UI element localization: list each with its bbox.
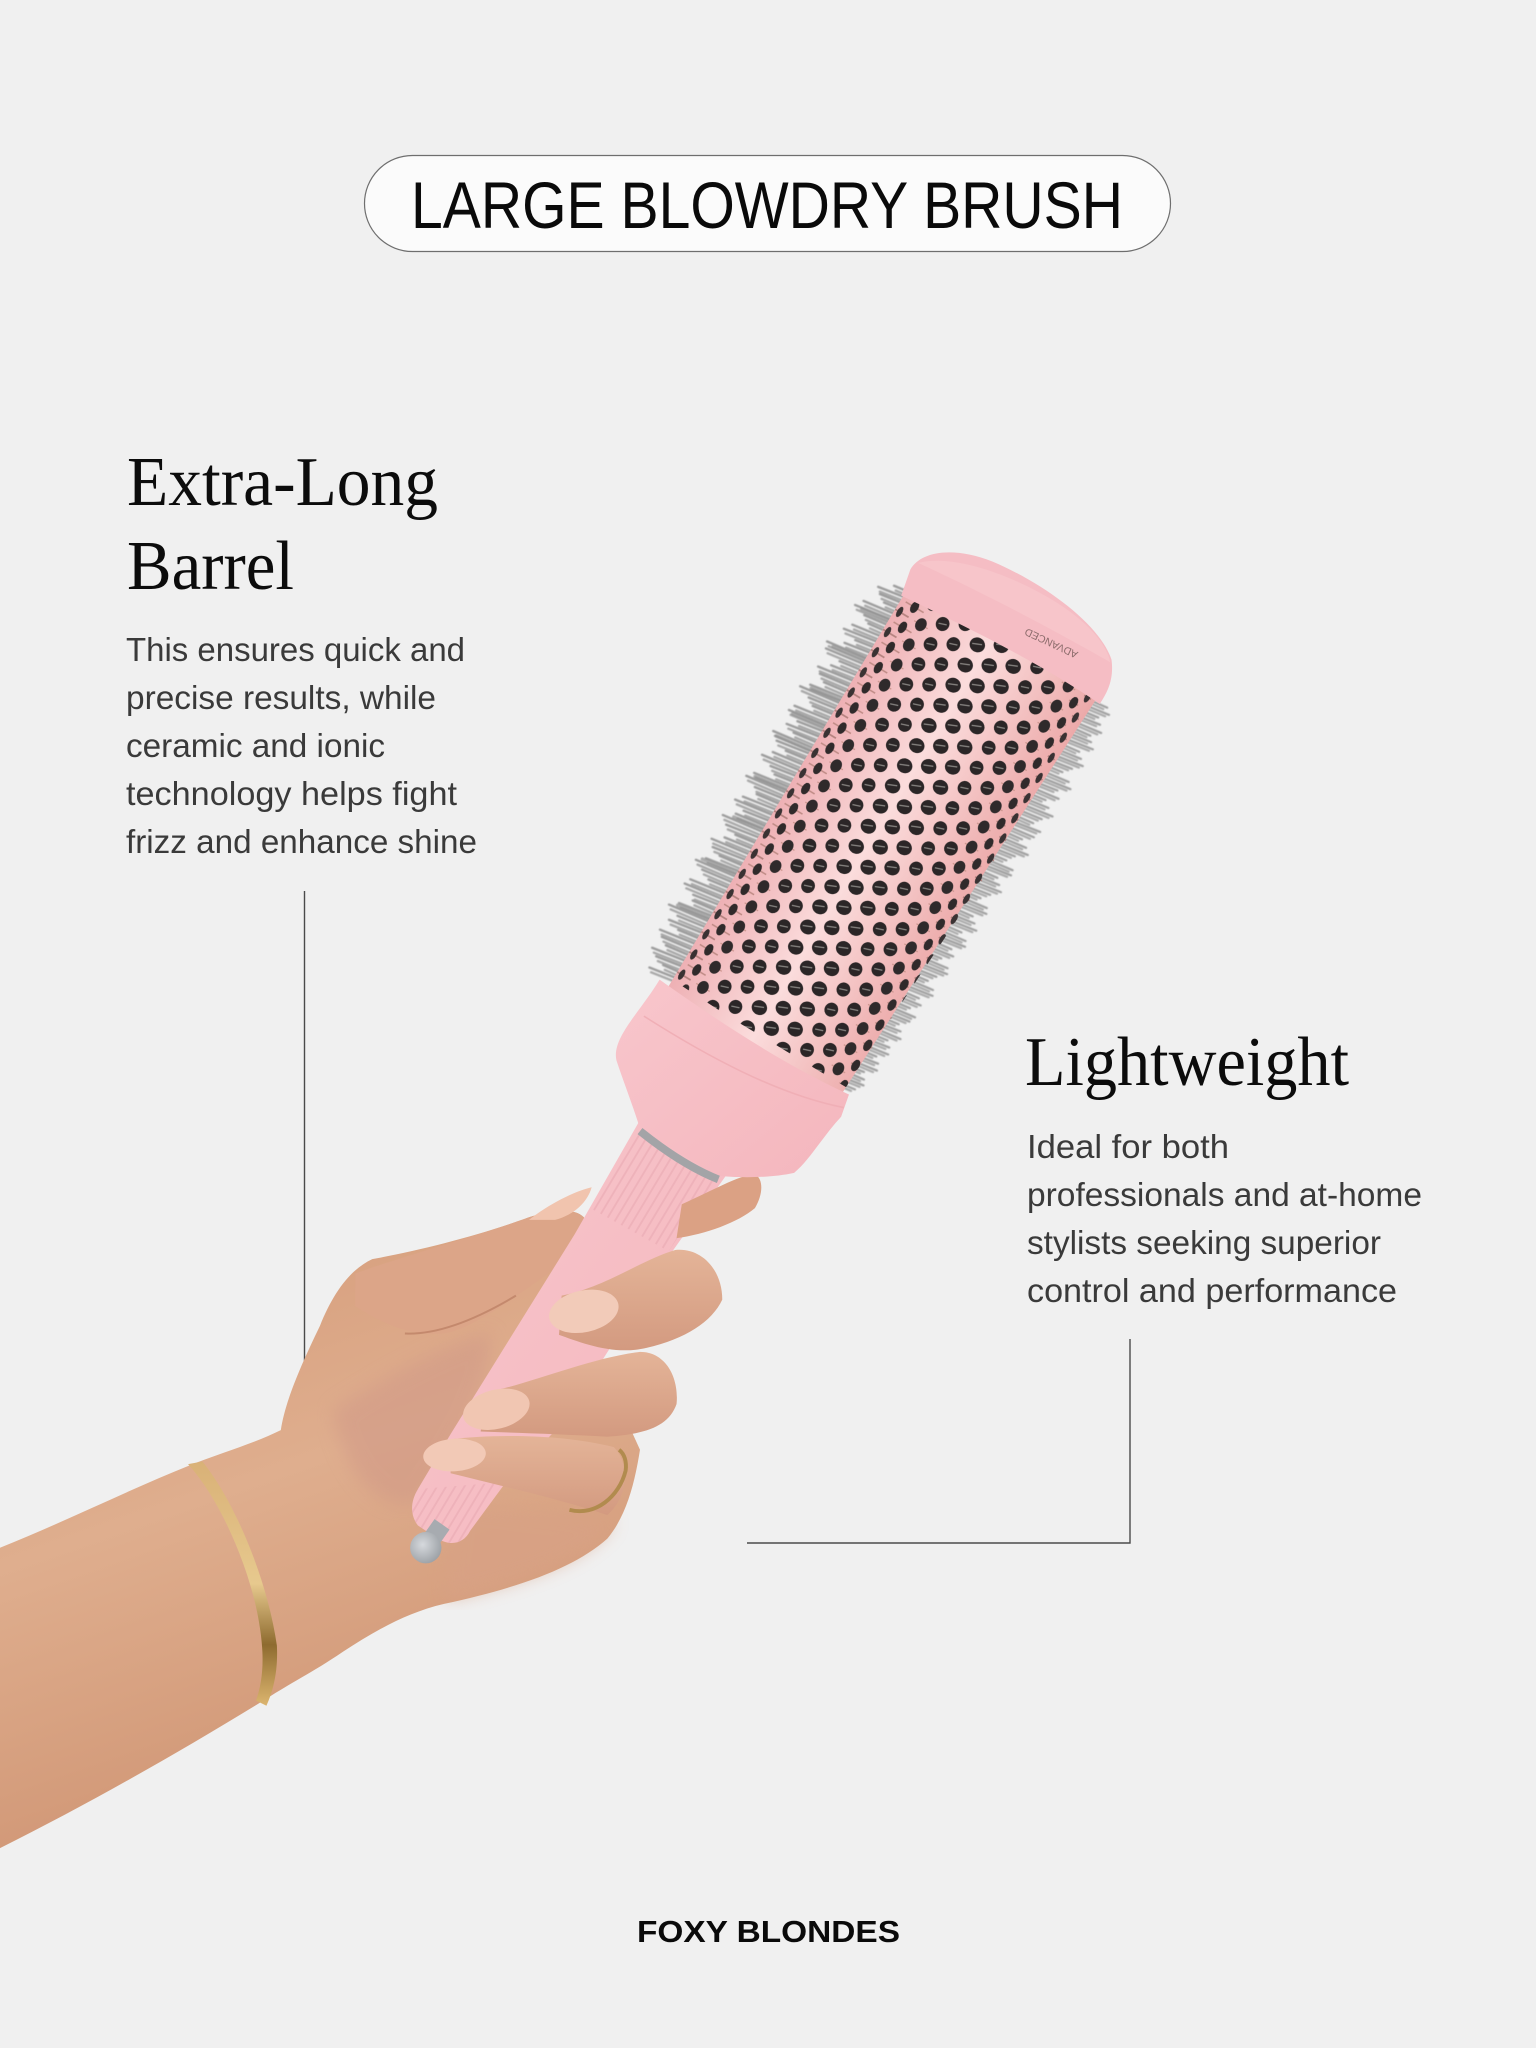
text block: barrel description: precise results, while bbox=[126, 679, 436, 716]
text block: barrel description: ceramic and ionic bbox=[126, 727, 385, 764]
heading: Extra-Long Barrel: Extra-Long bbox=[127, 444, 438, 521]
little finger bbox=[422, 1436, 625, 1515]
hand holding brush illustration bbox=[0, 544, 1130, 1848]
text block: barrel description: technology helps fight bbox=[126, 775, 457, 812]
text block: barrel description: This ensures quick and bbox=[126, 631, 465, 668]
lower palm tone bbox=[444, 1502, 614, 1600]
middle finger bbox=[545, 1250, 722, 1350]
barrel end cap: ADVANCED bbox=[1023, 625, 1080, 659]
barrel perforations bbox=[667, 576, 1097, 1092]
silver ferrule bbox=[640, 1131, 718, 1179]
heading: Extra-Long Barrel: Barrel bbox=[127, 528, 294, 605]
arm and palm bbox=[0, 1211, 640, 1848]
ring bbox=[569, 1450, 626, 1511]
text block: lightweight description: stylists seeking superior bbox=[1027, 1224, 1381, 1261]
text block: barrel description bbox=[126, 631, 477, 860]
brush barrel group bbox=[630, 544, 1130, 1116]
title pill: LARGE BLOWDRY BRUSH bbox=[411, 168, 1123, 242]
bristles left bbox=[634, 569, 914, 988]
text block: lightweight description bbox=[1027, 1128, 1422, 1309]
palm shading bbox=[333, 1332, 491, 1504]
index finger behind handle bbox=[677, 1174, 761, 1238]
thumb bbox=[355, 1187, 592, 1334]
leader line: barrel bbox=[304, 891, 306, 1366]
silver ball end bbox=[410, 1519, 450, 1563]
text block: lightweight description: professionals and at-home bbox=[1027, 1176, 1422, 1213]
title pill bbox=[364, 156, 1170, 252]
text block: lightweight description: control and performance bbox=[1027, 1272, 1397, 1309]
brush handle bbox=[412, 1097, 744, 1543]
text block: lightweight description: Ideal for both bbox=[1027, 1128, 1229, 1165]
collar bbox=[616, 980, 849, 1177]
ring finger bbox=[459, 1352, 677, 1437]
leader line: lightweight bbox=[747, 1339, 1130, 1543]
heading: Lightweight: Lightweight bbox=[1025, 1024, 1350, 1101]
barrel end cap bbox=[901, 552, 1112, 704]
bangle bbox=[188, 1462, 277, 1706]
barrel tube bbox=[666, 566, 1109, 1104]
brand footer: FOXY BLONDES bbox=[637, 1914, 900, 1949]
heading: Extra-Long Barrel bbox=[127, 444, 438, 605]
text block: barrel description: frizz and enhance shine bbox=[126, 823, 477, 860]
bristles right bbox=[834, 687, 1116, 1110]
